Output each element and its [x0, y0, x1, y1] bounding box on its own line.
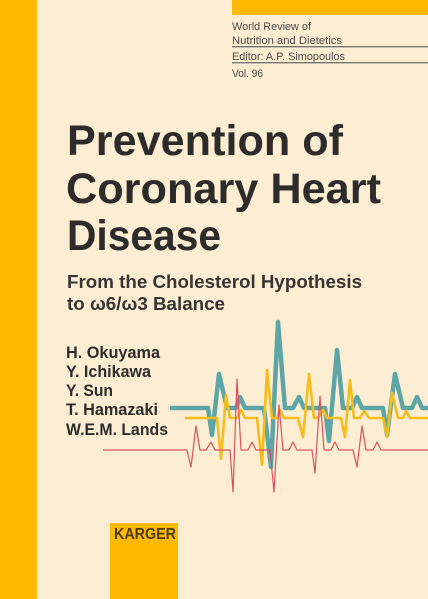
series information: Nutrition and Dietetics — [232, 35, 343, 47]
authors: Y. Ichikawa — [66, 362, 152, 381]
title: Disease — [67, 212, 221, 260]
red trace — [103, 379, 428, 492]
publisher name: KARGER — [114, 526, 176, 543]
series information: Vol. 96 — [232, 68, 263, 80]
series information: World Review of — [232, 21, 312, 33]
top orange band — [232, 0, 428, 15]
series information: Editor: A.P. Simopoulos — [232, 51, 345, 63]
subtitle: From the Cholesterol Hypothesis — [67, 271, 362, 292]
title: Coronary Heart — [66, 165, 381, 213]
yellow trace — [185, 370, 428, 465]
authors: Y. Sun — [66, 381, 113, 400]
authors — [66, 343, 168, 439]
title — [66, 117, 381, 260]
authors: W.E.M. Lands — [66, 420, 168, 439]
left orange band — [0, 0, 37, 599]
teal trace — [170, 322, 428, 467]
subtitle: to ω6/ω3 Balance — [67, 293, 225, 314]
authors: H. Okuyama — [66, 343, 161, 362]
series information — [232, 21, 428, 80]
publisher block — [110, 523, 178, 599]
authors: T. Hamazaki — [66, 400, 158, 419]
subtitle — [67, 271, 362, 314]
title: Prevention of — [67, 117, 344, 165]
ECG trace illustration — [103, 322, 428, 492]
